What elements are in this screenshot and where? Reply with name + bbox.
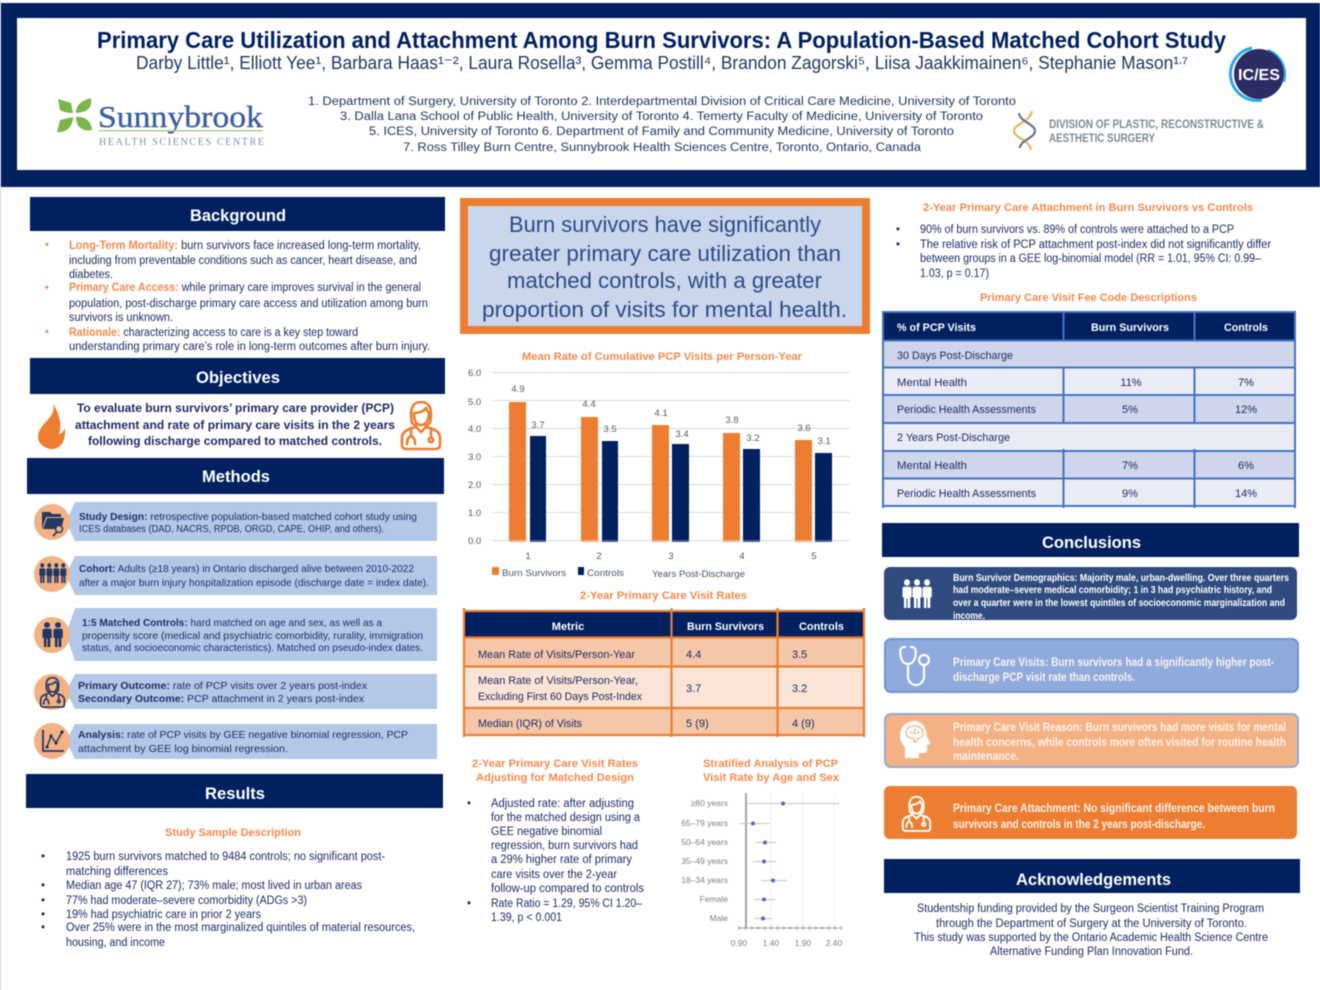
table title: fee codes: Primary Care Visit Fee Code Descriptions xyxy=(980,292,1197,304)
conclusion: attachment: Primary Care Attachment: No significant difference between burn xyxy=(953,803,1275,815)
bar chart: cumulative PCP visits: 3.8 xyxy=(725,415,739,426)
table: fee code descriptions: Controls xyxy=(1224,322,1268,334)
conclusion: visits xyxy=(885,639,1298,692)
text block: objective statement xyxy=(75,401,395,448)
heading: acknowledgements: Acknowledgements xyxy=(1016,870,1171,889)
text block: sample bullets: matching differences xyxy=(66,866,168,878)
method: cohort xyxy=(34,556,437,595)
text block: sample bullets: 19% had psychiatric care in prior 2 years xyxy=(66,909,261,921)
text block: sample bullets: 77% had moderate–severe comorbidity (ADGs >3) xyxy=(66,895,307,907)
logo: IC/ES: IC/ES xyxy=(1238,67,1280,84)
table: fee code descriptions: 14% xyxy=(1235,488,1257,500)
text block: adjusted rates: a 29% higher rate of primary xyxy=(491,854,632,866)
heading: stratified analysis: Visit Rate by Age and Sex xyxy=(703,772,840,784)
bar chart: cumulative PCP visits: 1 xyxy=(525,551,531,562)
chart legend: Controls xyxy=(587,568,624,579)
text block: sample bullets: • xyxy=(41,880,45,892)
method: cohort: after a major burn injury hospitalization episode (discharge date = index date). xyxy=(79,577,429,589)
heading: adjusted rates xyxy=(472,758,638,784)
callout: key finding xyxy=(464,202,866,330)
text block: background bullets: survivors is unknown. xyxy=(69,312,173,324)
text block: background bullets: Rationale: characterizing access to care is a key step toward xyxy=(69,327,358,339)
heading: background xyxy=(30,197,445,231)
heading: results: Results xyxy=(205,784,265,803)
text block: adjusted rates: GEE negative binomial xyxy=(491,826,602,838)
bar chart: cumulative PCP visits: 4.4 xyxy=(582,399,596,410)
heading: background: Background xyxy=(190,206,286,225)
table: fee code descriptions: 11% xyxy=(1120,377,1142,389)
icon: doctor xyxy=(402,402,440,449)
heading: stratified analysis: Stratified Analysis of PCP xyxy=(703,758,838,770)
table: fee code descriptions: Burn Survivors xyxy=(1091,322,1169,334)
table: fee code descriptions: % of PCP Visits xyxy=(897,322,976,334)
callout: key finding: matched controls, with a greater xyxy=(507,268,822,293)
bar chart: cumulative PCP visits: 3.7 xyxy=(531,420,545,431)
conclusion: visit reason: health concerns, while controls more often visited for routine health xyxy=(953,737,1286,749)
text block: acknowledgements: Alternative Funding Plan Innovation Fund. xyxy=(990,946,1193,958)
table: visit rates: 3.7 xyxy=(686,683,701,695)
forest plot: 1.40 xyxy=(763,938,780,948)
table: fee code descriptions: 2 Years Post-Discharge xyxy=(897,432,1010,444)
logo: Division of Plastic Surgery: AESTHETIC SURGERY xyxy=(1049,133,1155,145)
text block: background bullets: • xyxy=(45,326,49,338)
bar chart: cumulative PCP visits: 1.0 xyxy=(468,508,481,519)
method: study design xyxy=(34,502,437,541)
text block: adjusted rates: care visits over the 2-year xyxy=(491,869,617,881)
heading: attachment: 2-Year Primary Care Attachment in Burn Survivors vs Controls xyxy=(923,202,1253,214)
panel: objectives xyxy=(30,358,445,449)
bar chart: cumulative PCP visits: 2.0 xyxy=(468,480,481,491)
table: fee code descriptions: Periodic Health Assessments xyxy=(897,404,1036,416)
heading: methods xyxy=(27,458,444,494)
text block: background bullets: understanding primary care’s role in long-term outcomes after burn injury. xyxy=(69,341,430,353)
table: visit rates: 3.2 xyxy=(792,683,807,695)
text block: adjusted rates: follow-up compared to controls xyxy=(491,883,644,895)
text block: sample bullets: • xyxy=(41,909,45,921)
icon: flame xyxy=(38,404,65,449)
text block: adjusted rates: regression, burn survivors had xyxy=(491,840,638,852)
text block: background bullets: population, post-discharge primary care access and utilization among burn xyxy=(69,298,428,310)
conclusion: attachment: survivors and controls in the 2 years post-discharge. xyxy=(953,819,1205,831)
bar chart: cumulative PCP visits: 4 xyxy=(739,551,745,562)
conclusion: visit reason xyxy=(885,714,1298,767)
text block: adjusted rates: • xyxy=(467,798,471,810)
forest plot: 1.90 xyxy=(795,938,812,948)
method: matched controls: propensity score (medical and psychiatric comorbidity, rurality, immigration xyxy=(82,630,423,642)
method: matched controls xyxy=(34,608,437,661)
table title: visit rates: 2-Year Primary Care Visit Rates xyxy=(580,590,747,602)
bar chart: cumulative PCP visits xyxy=(468,368,850,580)
bar chart: cumulative PCP visits: 3 xyxy=(668,551,674,562)
authors: Darby Little¹, Elliott Yee¹, Barbara Haas¹⁻², Laura Rosella³, Gemma Postill⁴, Brandon Zagorski⁵, Liisa Jaakkimainen⁶, Stephanie Mason¹ xyxy=(136,53,1218,73)
heading: conclusions xyxy=(882,523,1299,557)
table: visit rates: Median (IQR) of Visits xyxy=(478,718,582,730)
method: analysis xyxy=(34,723,437,759)
text block: sample bullets: • xyxy=(41,922,45,934)
text block: acknowledgements: through the Department of Surgery at the University of Toronto. xyxy=(936,918,1247,930)
bar chart: cumulative PCP visits: 4.0 xyxy=(468,424,481,435)
conclusion: visit reason: maintenance. xyxy=(953,751,1019,763)
table: visit rates: 4 (9) xyxy=(792,718,815,730)
text block: attachment bullets: between groups in a GEE log-binomial model (RR = 1.01, 95% CI: 0.99– xyxy=(920,253,1262,265)
text block: background bullets: diabetes. xyxy=(69,269,113,281)
forest plot: 50–64 years xyxy=(681,837,728,847)
text block: acknowledgements: This study was supported by the Ontario Academic Health Science Centre xyxy=(914,932,1268,944)
panel: stratified analysis xyxy=(681,758,843,948)
forest plot: 35–49 years xyxy=(681,856,728,866)
table: fee code descriptions: 30 Days Post-Discharge xyxy=(897,350,1013,362)
conclusion: visits: discharge PCP visit rate than controls. xyxy=(953,672,1135,684)
table: visit rates: 4.4 xyxy=(686,649,701,661)
bar chart: cumulative PCP visits: 4.1 xyxy=(654,408,668,419)
title: Primary Care Utilization and Attachment Among Burn Survivors: A Population-Based Matched Cohort Study xyxy=(97,27,1226,53)
text block: attachment bullets: The relative risk of PCP attachment post-index did not significantly differ xyxy=(920,239,1271,251)
text block: adjusted rates: 1.39, p < 0.001 xyxy=(491,912,562,924)
affiliations: 7. Ross Tilley Burn Centre, Sunnybrook Health Sciences Centre, Toronto, Ontario, Canada xyxy=(403,142,922,154)
text block: acknowledgements xyxy=(914,903,1268,958)
text block: adjusted rates: Rate Ratio = 1.29, 95% CI 1.20– xyxy=(491,898,643,910)
conclusion: demographics: income. xyxy=(953,611,985,622)
text block: attachment bullets: 1.03, p = 0.17) xyxy=(920,268,989,280)
table: visit rates: Metric xyxy=(552,621,584,633)
table: visit rates: Burn Survivors xyxy=(687,621,764,633)
forest plot: 0.90 xyxy=(731,938,748,948)
table: fee code descriptions: 9% xyxy=(1122,488,1138,500)
forest plot: Female xyxy=(700,894,728,904)
bar chart: cumulative PCP visits: 3.5 xyxy=(603,424,617,435)
bar chart: cumulative PCP visits: 5.0 xyxy=(468,397,481,408)
table: fee code descriptions: 12% xyxy=(1235,404,1257,416)
text block: objective statement: To evaluate burn survivors’ primary care provider (PCP) xyxy=(77,401,394,415)
method: analysis: Analysis: rate of PCP visits by GEE negative binomial regression, PCP xyxy=(78,729,408,741)
forest plot xyxy=(681,793,843,948)
header banner xyxy=(1,3,1320,187)
table: fee code descriptions xyxy=(882,311,1296,508)
panel: attachment xyxy=(896,202,1271,280)
table: fee code descriptions: 7% xyxy=(1122,460,1138,472)
affiliations: 5. ICES, University of Toronto 6. Department of Family and Community Medicine, University of Toronto xyxy=(369,126,954,138)
text block: acknowledgements: Studentship funding provided by the Surgeon Scientist Training Program xyxy=(917,903,1264,915)
text block: background bullets: including from preventable conditions such as cancer, heart disease, and xyxy=(69,255,417,267)
bar chart: cumulative PCP visits: 3.2 xyxy=(746,433,760,444)
subheading: study sample description: Study Sample Description xyxy=(165,827,301,839)
method: outcomes: Primary Outcome: rate of PCP visits over 2 years post-index xyxy=(78,680,368,692)
affiliations: 3. Dalla Lana School of Public Health, University of Toronto 4. Temerty Faculty of Medicine, University of Toronto xyxy=(340,111,983,123)
text block: sample bullets: • xyxy=(41,895,45,907)
logo: IC/ES xyxy=(1231,48,1285,100)
table: visit rates: Controls xyxy=(799,621,844,633)
heading: adjusted rates: 2-Year Primary Care Visit Rates xyxy=(472,758,638,770)
table: visit rates xyxy=(463,608,865,737)
method: outcomes: Secondary Outcome: PCP attachment in 2 years post-index xyxy=(78,693,365,705)
bar chart: cumulative PCP visits: 3.1 xyxy=(817,436,831,447)
table: fee code descriptions: 6% xyxy=(1238,460,1254,472)
text block: objective statement: following discharge compared to matched controls. xyxy=(88,434,382,448)
chart legend: Burn Survivors xyxy=(502,568,566,579)
text block: sample bullets xyxy=(41,851,415,949)
text block: attachment bullets: • xyxy=(896,224,900,236)
text block: sample bullets: • xyxy=(41,851,45,863)
text block: attachment bullets: • xyxy=(896,239,900,251)
forest plot: Male xyxy=(710,913,728,923)
text block: adjusted rates: for the matched design using a xyxy=(491,812,641,824)
text block: sample bullets: Over 25% were in the most marginalized quintiles of material resources, xyxy=(66,922,415,934)
callout: key finding: greater primary care utilization than xyxy=(489,241,841,266)
bar chart: cumulative PCP visits: 3.4 xyxy=(675,429,689,440)
authors: ⁷ xyxy=(1182,53,1188,73)
text block: objective statement: attachment and rate of primary care visits in the 2 years xyxy=(75,418,395,432)
text block: sample bullets: 1925 burn survivors matched to 9484 controls; no significant post- xyxy=(66,851,385,863)
panel: acknowledgements xyxy=(884,859,1300,958)
text block: background bullets: Long-Term Mortality: burn survivors face increased long-term mortality, xyxy=(69,240,421,252)
text block: background bullets: • xyxy=(45,282,49,294)
bar chart: cumulative PCP visits: 5 xyxy=(811,551,817,562)
heading: acknowledgements xyxy=(884,859,1300,893)
method: outcomes xyxy=(34,674,437,710)
table: visit rates: 5 (9) xyxy=(686,718,709,730)
authors: , xyxy=(1179,55,1182,66)
text block: adjusted rates xyxy=(467,798,644,924)
logo: Division of Plastic Surgery xyxy=(1014,111,1264,150)
heading: adjusted rates: Adjusting for Matched Design xyxy=(476,772,634,784)
text block: sample bullets: housing, and income xyxy=(66,937,165,949)
method: study design: ICES databases (DAD, NACRS, RPDB, ORGD, CAPE, OHIP, and others). xyxy=(79,523,384,535)
panel: adjusted rates xyxy=(467,758,644,924)
heading: conclusions: Conclusions xyxy=(1042,533,1141,552)
heading: objectives: Objectives xyxy=(196,368,280,387)
table: fee code descriptions: 5% xyxy=(1122,404,1138,416)
bar chart: cumulative PCP visits: 6.0 xyxy=(468,368,481,379)
table: visit rates: Excluding First 60 Days Post-Index xyxy=(478,691,642,703)
panel: conclusions xyxy=(882,523,1299,839)
text block: attachment bullets xyxy=(896,224,1271,280)
logo: Sunnybrook: HEALTH SCIENCES CENTRE xyxy=(99,137,264,148)
method: matched controls: 1:5 Matched Controls: hard matched on age and sex, as well as a xyxy=(82,617,382,629)
conclusion: attachment xyxy=(884,786,1297,839)
heading: methods: Methods xyxy=(202,467,270,486)
conclusion: visits: Primary Care Visits: Burn survivors had a significantly higher post- xyxy=(953,657,1274,669)
panel: methods xyxy=(27,458,444,759)
text block: adjusted rates: Adjusted rate: after adjusting xyxy=(491,798,634,810)
method: cohort: Cohort: Adults (≥18 years) in Ontario discharged alive between 2010-2022 xyxy=(79,563,414,575)
forest plot: 2.40 xyxy=(826,938,843,948)
affiliations: 1. Department of Surgery, University of Toronto 2. Interdepartmental Division of Critical Care Medicine, University of Toronto xyxy=(308,96,1016,108)
bar chart: cumulative PCP visits: 3.0 xyxy=(468,452,481,463)
method: analysis: attachment by GEE log binomial regression. xyxy=(78,743,288,755)
bar chart: cumulative PCP visits: 0.0 xyxy=(468,536,481,547)
method: study design: Study Design: retrospective population-based matched cohort study using xyxy=(79,511,417,523)
chart legend: Years Post-Discharge xyxy=(652,569,745,580)
chart legend xyxy=(492,567,745,580)
forest plot: ≥80 years xyxy=(691,798,728,808)
text block: background bullets xyxy=(45,239,430,353)
table: visit rates: Mean Rate of Visits/Person-Year xyxy=(478,649,635,661)
table: visit rates: 3.5 xyxy=(792,649,807,661)
table: fee code descriptions: Periodic Health Assessments xyxy=(897,488,1036,500)
table: fee code descriptions: Mental Health xyxy=(897,460,967,472)
conclusion: demographics: had moderate–severe medical comorbidity; 1 in 3 had psychiatric history, and xyxy=(953,585,1272,596)
bar chart: cumulative PCP visits: 3.6 xyxy=(797,423,811,434)
affiliations xyxy=(308,96,1016,154)
bar chart: cumulative PCP visits: 2 xyxy=(596,551,602,562)
text block: attachment bullets: 90% of burn survivors vs. 89% of controls were attached to a PCP xyxy=(920,224,1234,236)
forest plot: 18–34 years xyxy=(681,875,728,885)
table: visit rates: Mean Rate of Visits/Person-Year, xyxy=(478,675,638,687)
text block: background bullets: • xyxy=(45,239,49,251)
heading: stratified analysis xyxy=(703,758,840,784)
panel: results xyxy=(26,774,443,949)
text block: sample bullets: Median age 47 (IQR 27); 73% male; most lived in urban areas xyxy=(66,880,362,892)
logo: Sunnybrook xyxy=(57,98,264,148)
bar chart: cumulative PCP visits: 4.9 xyxy=(511,384,525,395)
chart title: mean rate: Mean Rate of Cumulative PCP Visits per Person-Year xyxy=(522,351,803,363)
panel: background xyxy=(30,197,445,353)
table: fee code descriptions: 7% xyxy=(1238,377,1254,389)
forest plot: 65–79 years xyxy=(681,818,728,828)
text block: adjusted rates: • xyxy=(467,898,471,910)
method: matched controls: status, and socioeconomic characteristics). Matched on pseudo-index dates. xyxy=(82,642,423,654)
conclusion: demographics xyxy=(884,567,1297,622)
logo: Division of Plastic Surgery: DIVISION OF PLASTIC, RECONSTRUCTIVE & xyxy=(1049,119,1264,131)
text block: background bullets: Primary Care Access: while primary care improves survival in the general xyxy=(69,282,421,294)
logo: Sunnybrook: Sunnybrook xyxy=(98,99,264,134)
table: fee code descriptions: Mental Health xyxy=(897,377,967,389)
callout: key finding: proportion of visits for mental health. xyxy=(482,297,847,322)
callout: key finding: Burn survivors have significantly xyxy=(509,212,821,237)
heading: objectives xyxy=(30,358,445,394)
heading: results xyxy=(26,774,443,808)
